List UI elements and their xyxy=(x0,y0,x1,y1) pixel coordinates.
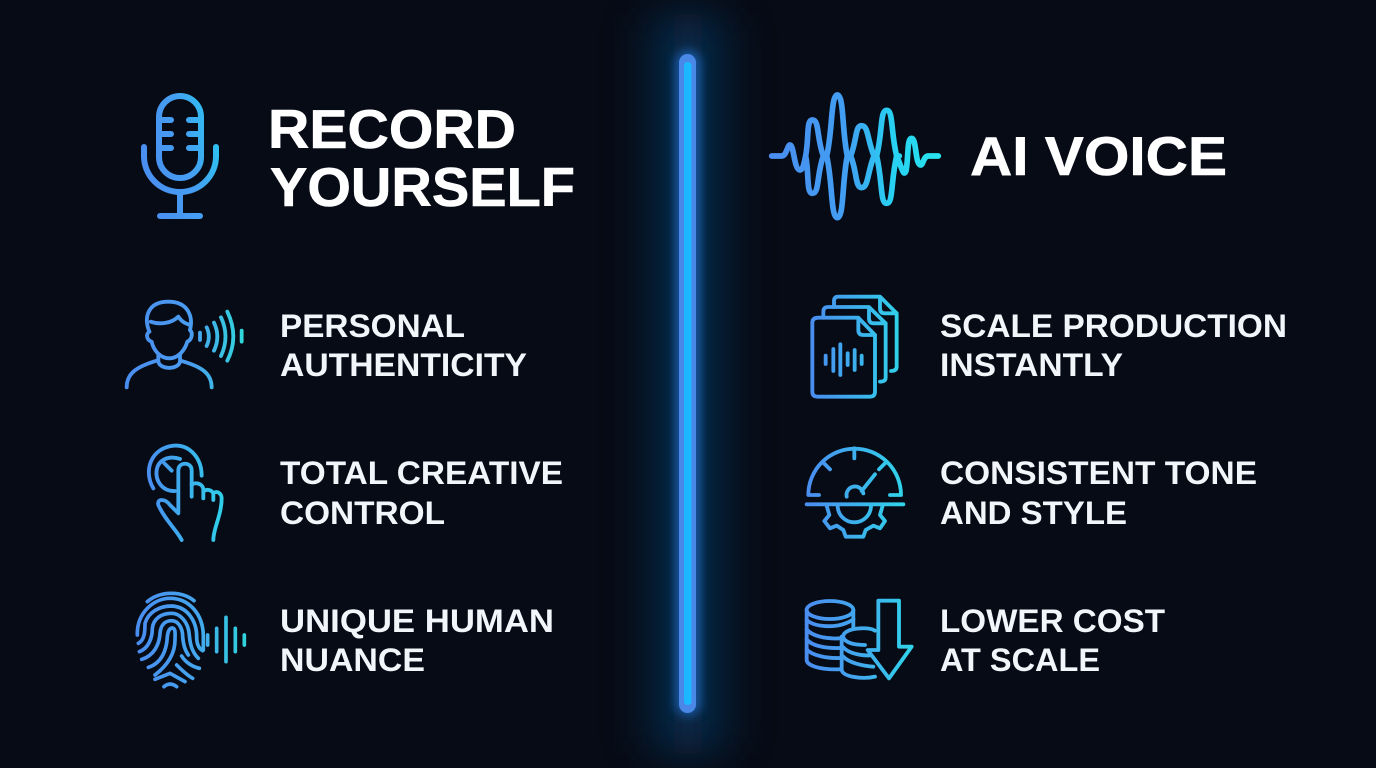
text: consistent tone and style: AND STYLE xyxy=(940,495,1127,531)
icon: hand touching dial xyxy=(149,446,222,540)
text: unique human nuance xyxy=(280,603,554,678)
text: personal authenticity: AUTHENTICITY xyxy=(280,347,527,383)
text: consistent tone and style: CONSISTENT TONE xyxy=(940,455,1257,491)
text: scale production instantly: INSTANTLY xyxy=(940,347,1123,383)
heading: record yourself xyxy=(268,98,575,218)
icon: person speaking xyxy=(127,302,242,387)
text: personal authenticity xyxy=(280,308,527,383)
text: lower cost at scale: AT SCALE xyxy=(940,642,1100,678)
icon: microphone xyxy=(144,96,216,216)
text: lower cost at scale xyxy=(940,603,1165,678)
heading: record yourself: YOURSELF xyxy=(270,156,575,218)
text: consistent tone and style xyxy=(940,455,1257,531)
icon: coin stacks and down arrow xyxy=(807,601,912,678)
text: scale production instantly: SCALE PRODUCTION xyxy=(940,308,1287,344)
icon: fingerprint with sound bars xyxy=(137,593,244,687)
text: total creative control xyxy=(280,455,563,531)
text: scale production instantly xyxy=(940,308,1287,383)
icon: gauge and gear xyxy=(807,448,903,537)
text: total creative control: CONTROL xyxy=(280,495,445,531)
icon: sound waveform xyxy=(772,95,938,218)
icon: stacked audio files xyxy=(812,297,897,397)
text: lower cost at scale: LOWER COST xyxy=(940,603,1165,639)
central glowing divider xyxy=(628,14,748,754)
text: personal authenticity: PERSONAL xyxy=(280,308,465,344)
text: total creative control: TOTAL CREATIVE xyxy=(280,455,563,491)
text: unique human nuance: UNIQUE HUMAN xyxy=(280,603,554,639)
panel: ai voice xyxy=(772,95,1287,678)
panel: record yourself xyxy=(127,96,575,687)
heading: ai voice: AI VOICE xyxy=(970,125,1227,187)
text: unique human nuance: NUANCE xyxy=(280,642,425,678)
heading: record yourself: RECORD xyxy=(268,98,516,160)
